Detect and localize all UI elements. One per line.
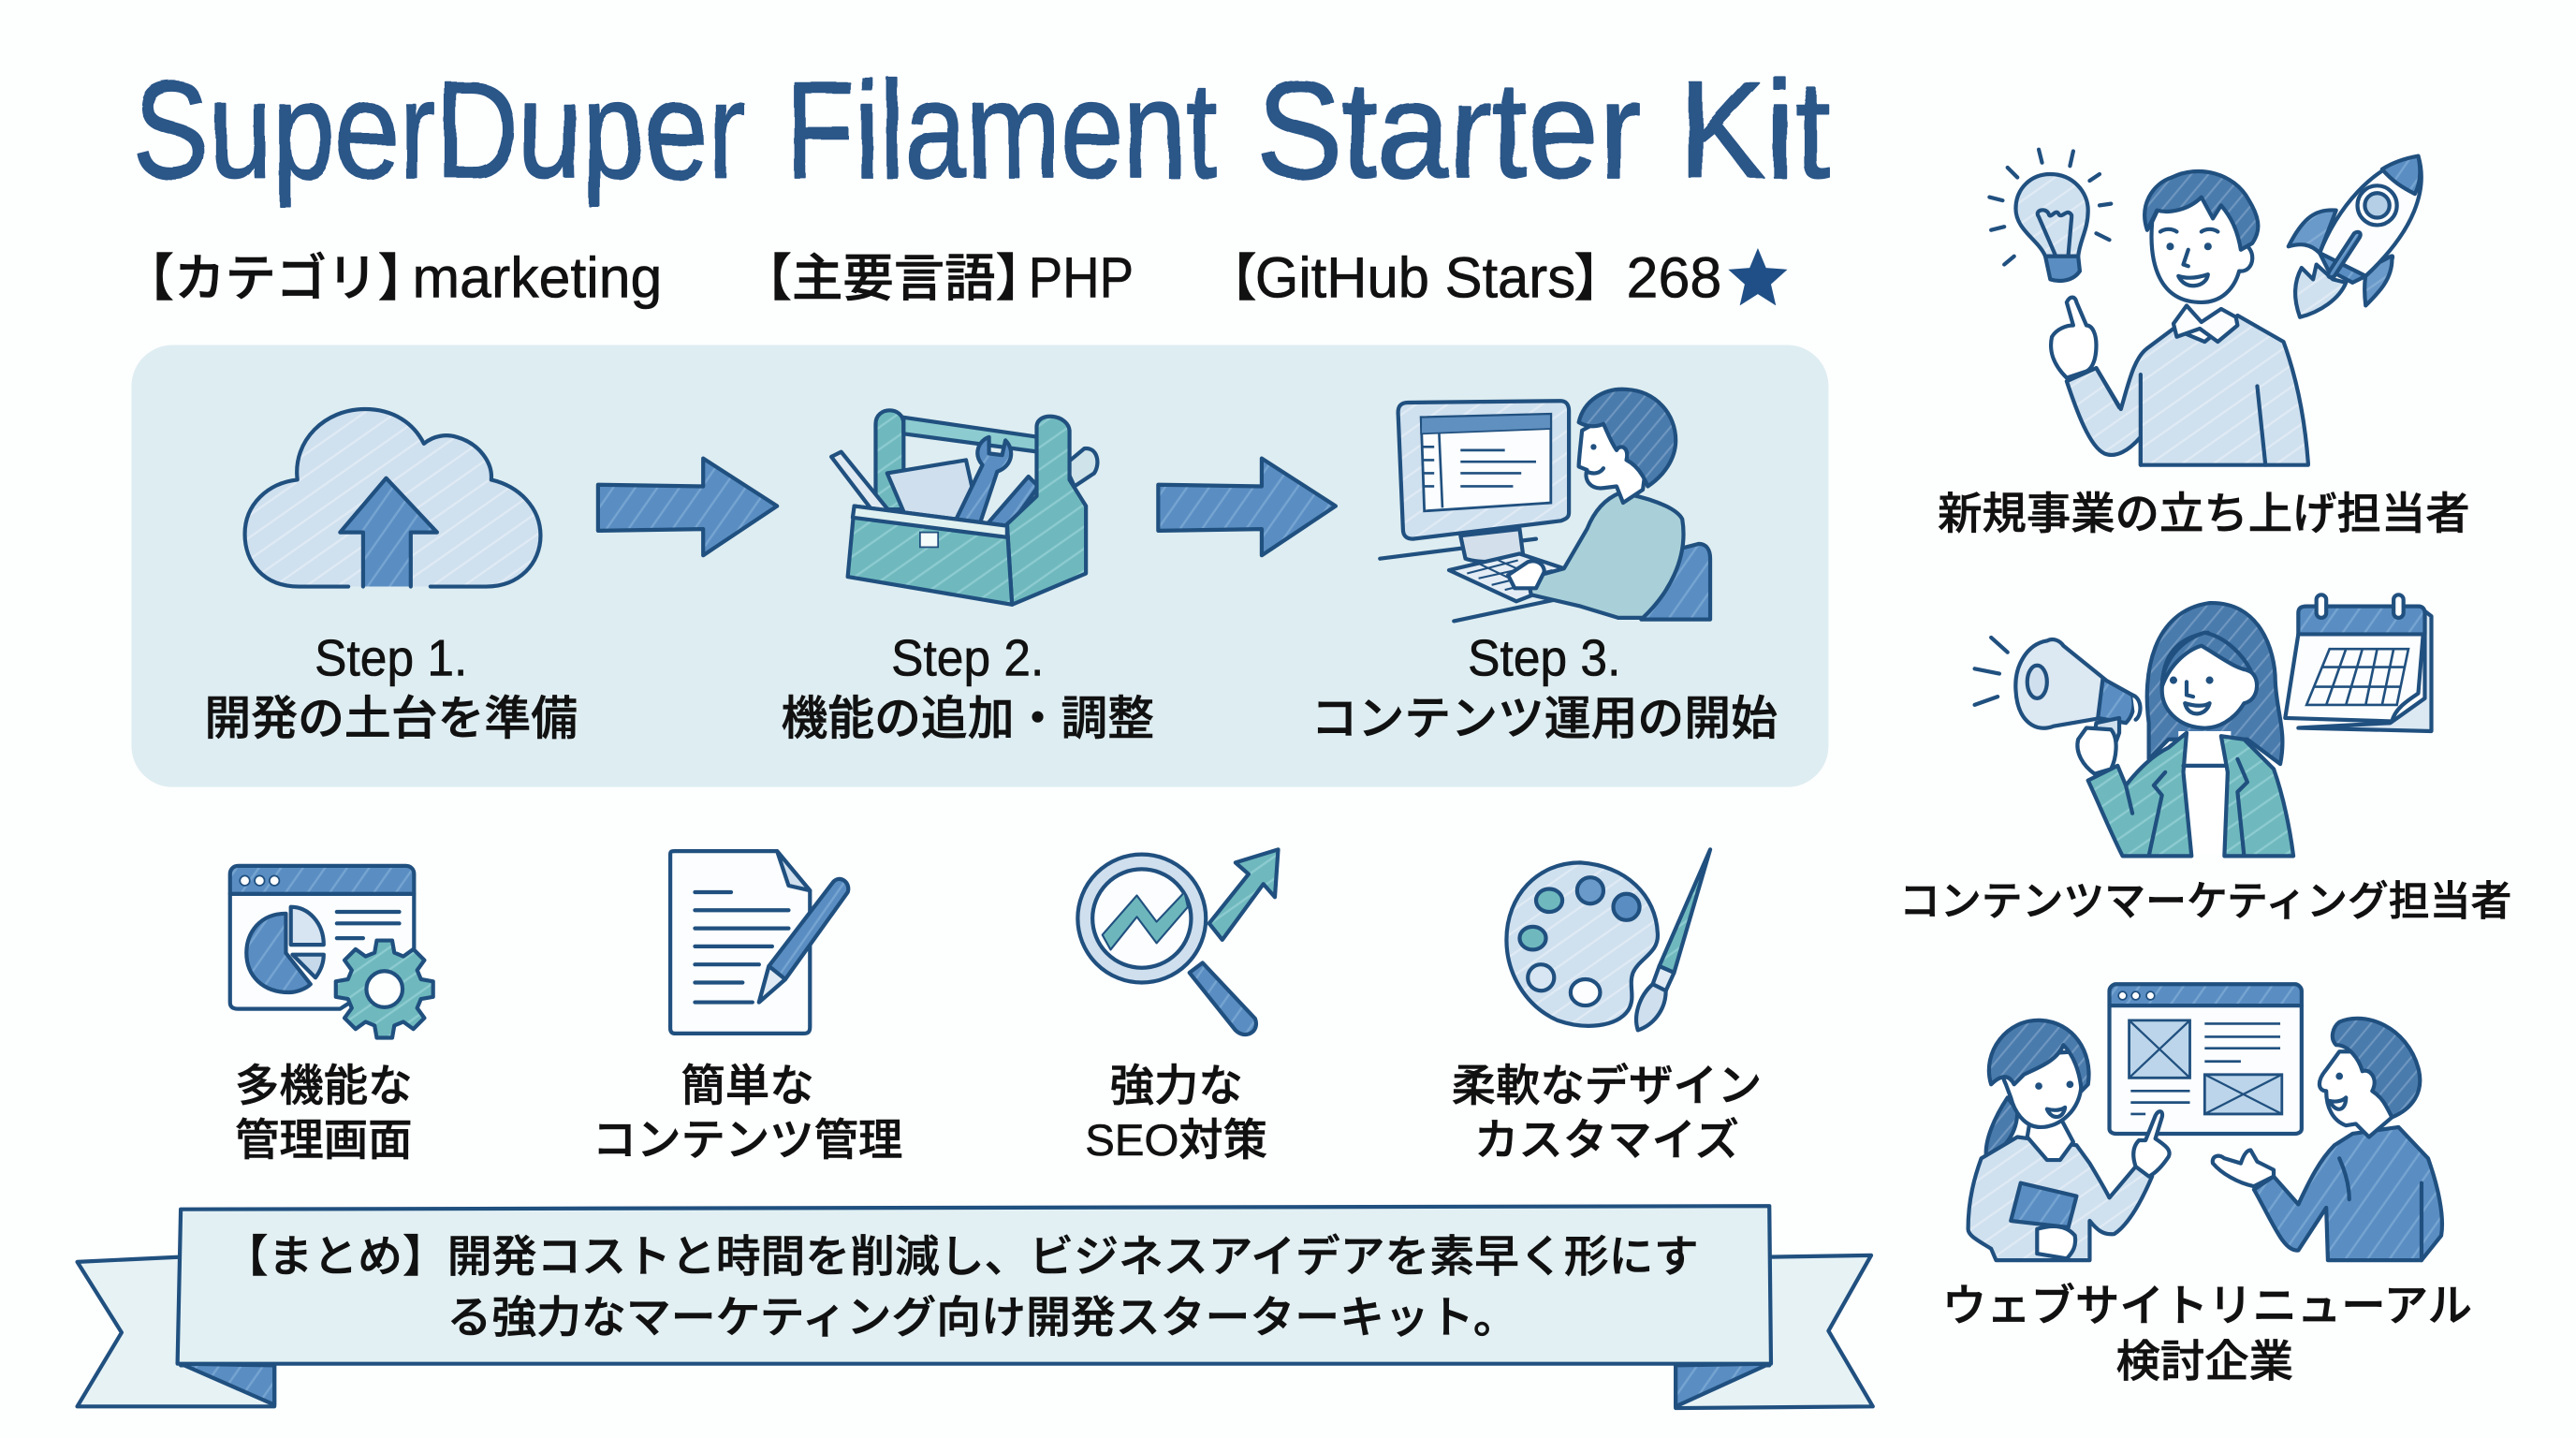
step 2 label: [781, 629, 1154, 744]
step 3: person at computer icon: [1380, 389, 1710, 621]
audience 3: website renewal: [1942, 984, 2472, 1387]
title: Starter: [1257, 54, 1641, 208]
meta info row: 【: [1206, 250, 1257, 307]
feature label line 2: 管理画面: [235, 1116, 413, 1166]
step 2: toolbox icon: [831, 410, 1097, 605]
step 3 label: [1311, 629, 1778, 744]
label: 柔軟なデザイン: [1452, 1062, 1762, 1111]
meta info row: 【カテゴリ】: [124, 250, 429, 307]
meta info row: 【主要言語】: [741, 250, 1046, 307]
icon: rocket: [2289, 156, 2422, 317]
icon: megaphone: [1975, 638, 2140, 769]
feature label line 2: SEO対策: [1085, 1116, 1267, 1166]
arrow 1: [598, 459, 777, 555]
icon: dashboard window with gear: [230, 866, 433, 1037]
summary text: 【まとめ】開発コストと時間を削減し、ビジネスアイデアを素早く形にす: [224, 1232, 1699, 1282]
label: 多機能な: [235, 1062, 413, 1111]
label: コンテンツマーケティング担当者: [1899, 879, 2511, 925]
icon: woman with jacket: [2077, 603, 2293, 856]
feature label line 2: コンテンツ管理: [593, 1116, 902, 1166]
icon: woman pointing: [1969, 1020, 2170, 1260]
icon: magnifier with chart: [1077, 849, 1278, 1034]
title: Filament: [785, 54, 1218, 208]
meta info row: 】: [1573, 250, 1625, 307]
meta info row: marketing: [413, 246, 662, 311]
label: ウェブサイトリニューアル: [1942, 1282, 2472, 1331]
label: 検討企業: [2116, 1338, 2293, 1387]
title: SuperDuper: [133, 54, 746, 208]
step 1: cloud upload icon: [245, 409, 540, 587]
step 1 label: [204, 629, 578, 744]
icon: man gesturing: [2213, 1019, 2442, 1260]
label: [1942, 1282, 2472, 1387]
audience 2: content marketing: [1899, 594, 2511, 925]
icon: light bulb: [1989, 150, 2111, 281]
feature label line 2: カスタマイズ: [1474, 1116, 1739, 1166]
icon: man pointing: [2051, 171, 2308, 465]
icon: document with pen: [670, 851, 848, 1034]
icon: palette and brush: [1506, 849, 1710, 1030]
step 2 label: Step 2.: [891, 629, 1044, 686]
title: Kit: [1679, 54, 1830, 208]
summary ribbon: [78, 1206, 1873, 1408]
step 3 label: Step 3.: [1468, 629, 1620, 686]
step 3 label: コンテンツ運用の開始: [1311, 692, 1778, 744]
feature: SEO: [1077, 849, 1278, 1111]
icon: calendar: [2285, 594, 2431, 731]
meta info row: PHP: [1029, 246, 1134, 311]
arrow 2: [1158, 459, 1336, 555]
summary text: [224, 1232, 1699, 1343]
step 1 label: Step 1.: [315, 629, 467, 686]
meta info row: 268: [1627, 246, 1721, 311]
summary text: る強力なマーケティング向け開発スターターキット。: [446, 1293, 1518, 1343]
step 1 label: 開発の土台を準備: [204, 692, 578, 744]
meta info row: [124, 246, 1788, 311]
step 2 label: 機能の追加・調整: [781, 692, 1154, 744]
label: 新規事業の立ち上げ担当者: [1938, 490, 2470, 539]
audience 1: new business owner: [1938, 150, 2470, 539]
label: 簡単な: [681, 1062, 814, 1111]
feature: admin panel: [230, 866, 433, 1111]
panel: steps: [131, 345, 1828, 787]
title: [133, 54, 1830, 208]
feature: content management: [670, 851, 848, 1111]
feature: design: [1452, 849, 1762, 1111]
icon: wireframe window: [2110, 984, 2302, 1134]
meta info row: GitHub Stars: [1255, 246, 1575, 311]
label: 強力な: [1110, 1062, 1243, 1111]
